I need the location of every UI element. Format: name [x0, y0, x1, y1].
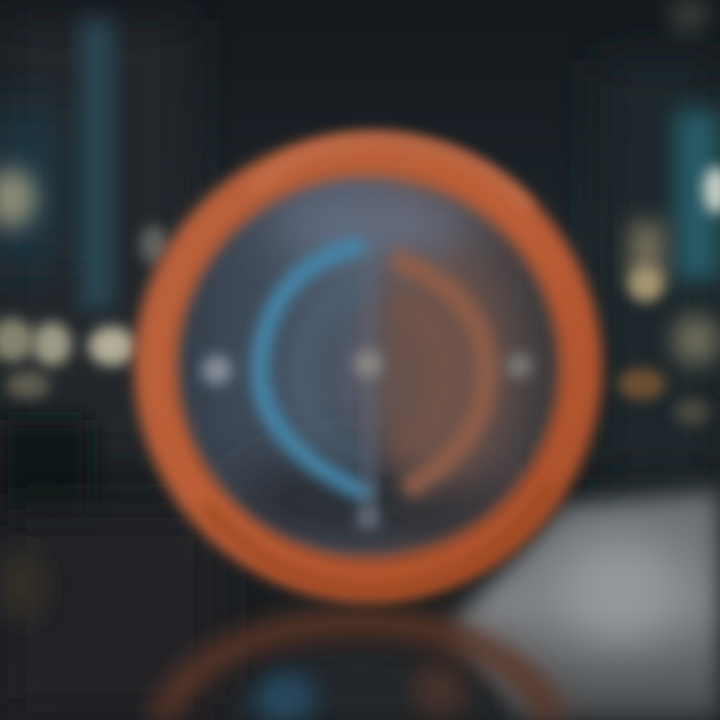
marker: bottom [356, 506, 380, 530]
ring: orange [156, 155, 580, 579]
arc: orange right inner [392, 300, 446, 455]
background: blurred city and lights, left side [0, 20, 190, 520]
centre divider [362, 210, 376, 520]
face shading: darker lower rim [228, 450, 508, 550]
arc: orange right outer [392, 258, 486, 490]
marker: left [202, 355, 232, 385]
face shading: pale top [270, 191, 470, 259]
marker: centre [354, 350, 382, 378]
arc: blue left [260, 245, 372, 495]
arc: pale blue inner [298, 285, 372, 462]
floor: dark, lower left [0, 510, 220, 720]
ring highlight [250, 140, 530, 208]
dial face [172, 170, 564, 562]
reflection: ring on floor [160, 622, 555, 720]
face shading: warm right half [380, 250, 510, 490]
ring lower shade [205, 485, 552, 590]
dial: ring and face [156, 140, 580, 590]
marker: right [506, 353, 532, 379]
floor: reflective grey, lower right [450, 490, 720, 720]
background: blurred city and lights, right side [600, 0, 720, 480]
